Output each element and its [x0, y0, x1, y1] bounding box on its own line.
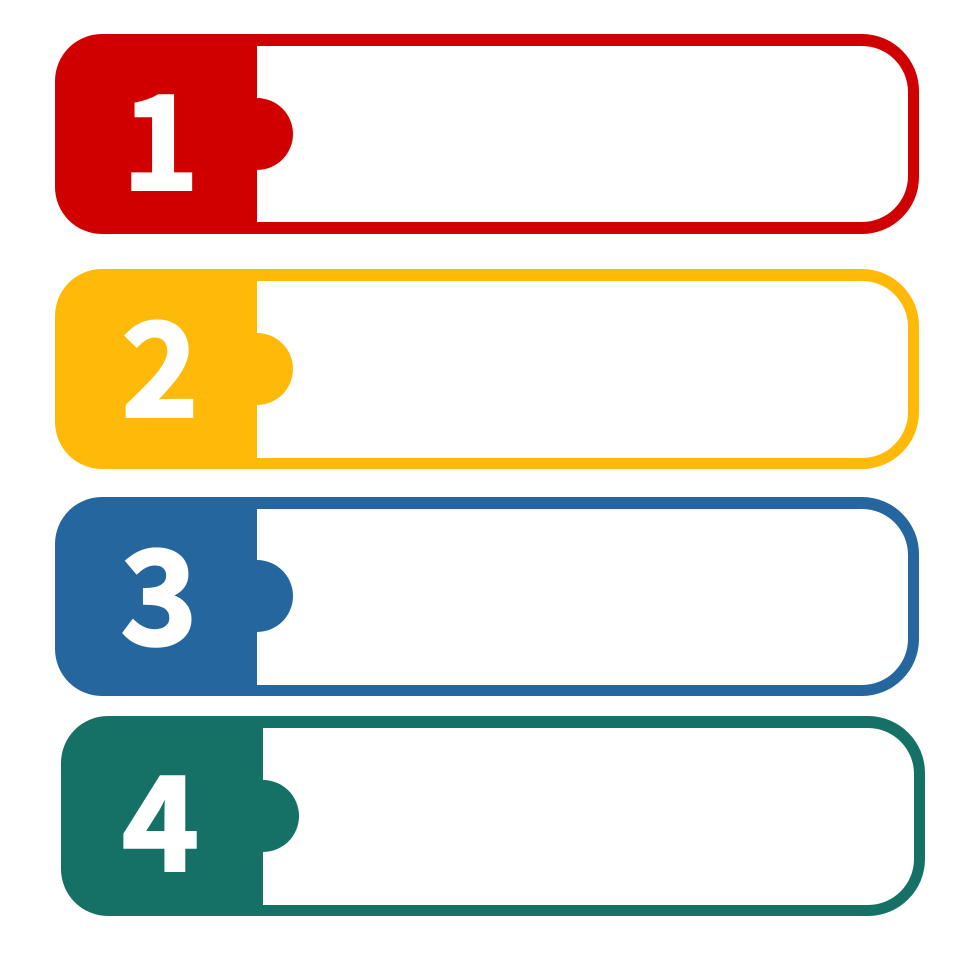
- card 2 outline: [55, 269, 919, 469]
- card 1 number tab with puzzle knob: [55, 34, 293, 234]
- card 2 number tab with puzzle knob: [55, 269, 293, 469]
- number 3: 3: [121, 494, 197, 682]
- card 4 number tab with puzzle knob: [61, 716, 299, 916]
- card 4 outline: [61, 716, 925, 916]
- card 1: red: [55, 34, 919, 234]
- number 4: 4: [122, 720, 199, 908]
- card 2: yellow: [55, 266, 919, 469]
- card 4: green: [61, 716, 925, 916]
- card 3: blue: [55, 494, 919, 696]
- number 1: 1: [122, 40, 199, 228]
- card 3 outline: [55, 497, 919, 696]
- card 1 outline: [55, 34, 919, 234]
- card 3 number tab with puzzle knob: [55, 497, 293, 696]
- number 2: 2: [122, 266, 198, 454]
